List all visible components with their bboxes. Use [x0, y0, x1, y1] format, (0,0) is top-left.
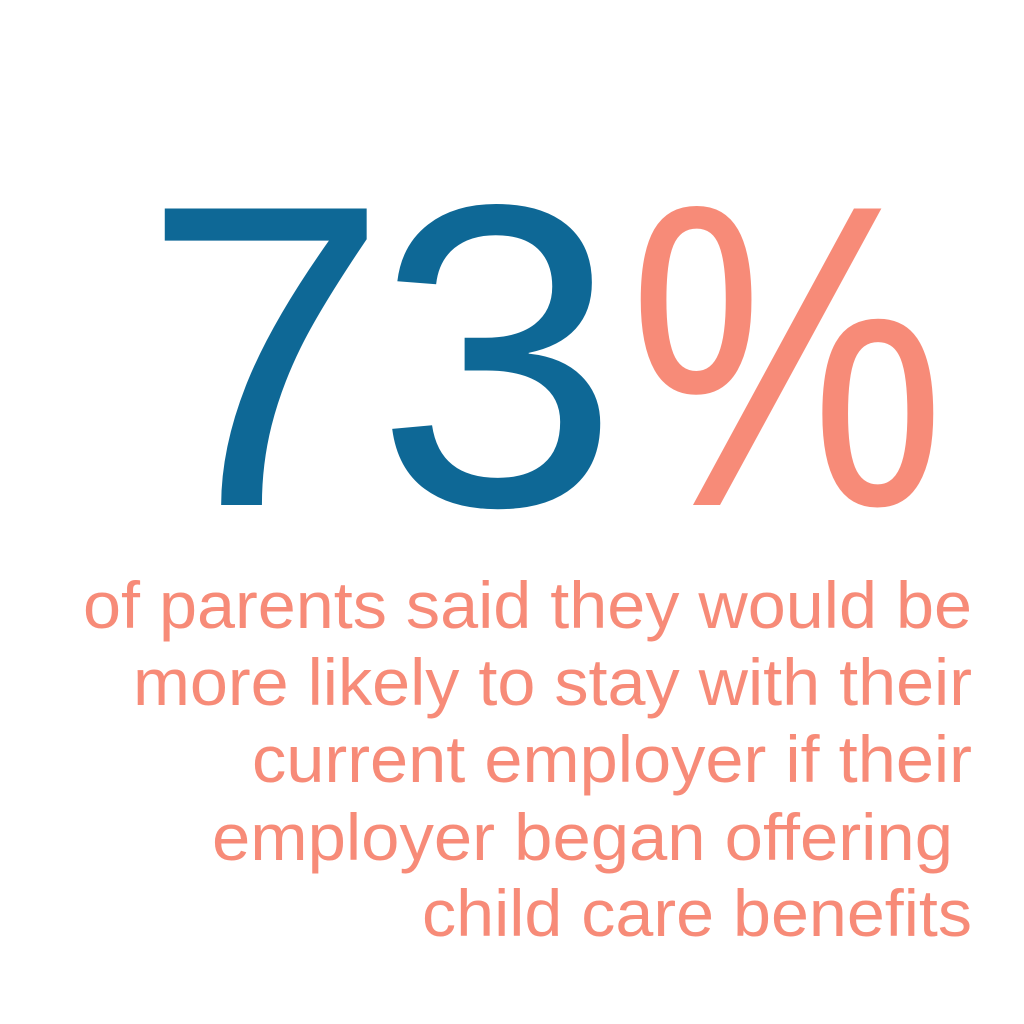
line 3: current employer if their [252, 722, 972, 796]
description text [83, 568, 972, 950]
line 5: child care benefits [422, 876, 972, 950]
line 1: of parents said they would be [83, 568, 972, 642]
digit 7: 7 [142, 116, 389, 597]
line 4: employer began offering [212, 800, 953, 874]
line 2: more likely to stay with their [133, 645, 972, 719]
percent sign: % [628, 116, 946, 597]
headline statistic: 73% [142, 116, 946, 597]
digit 3: 3 [376, 116, 620, 597]
